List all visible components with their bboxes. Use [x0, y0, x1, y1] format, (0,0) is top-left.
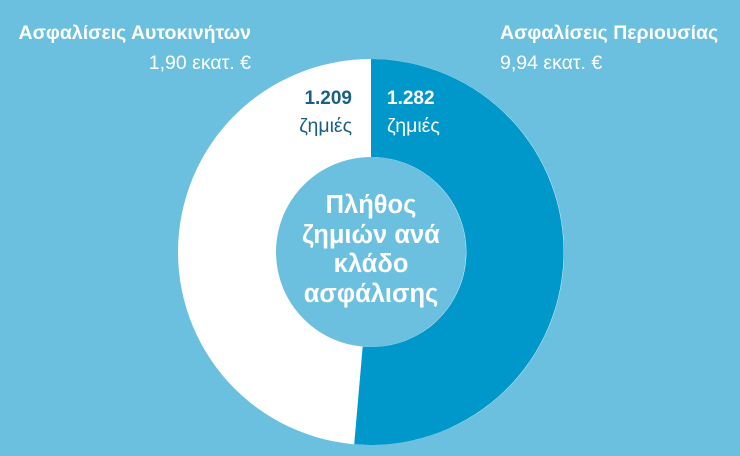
label: property insurance: 9,94 εκατ. €: [500, 52, 602, 74]
value: 1.282 claims: ζημιές: [387, 115, 440, 137]
center title: Πλήθος: [326, 191, 416, 219]
segment: property claims (dark blue): [354, 59, 564, 445]
value: 1.282 claims: 1.282: [387, 88, 435, 109]
center title: ασφάλισης: [304, 280, 438, 308]
label: motor insurance: Ασφαλίσεις Αυτοκινήτων: [18, 22, 251, 44]
value: 1.282 claims: [387, 88, 440, 137]
center title: [302, 191, 440, 308]
value: 1.209 claims: ζημιές: [299, 115, 352, 137]
label: motor insurance: 1,90 εκατ. €: [149, 52, 251, 74]
value: 1.209 claims: [299, 88, 352, 137]
center hole: [276, 157, 466, 347]
label: motor insurance: [18, 22, 251, 74]
value: 1.209 claims: 1.209: [304, 88, 352, 109]
segment: motor claims (white): [178, 59, 564, 445]
center title: κλάδο: [334, 250, 408, 278]
center title: ζημιών ανά: [302, 220, 440, 248]
label: property insurance: [500, 22, 718, 74]
label: property insurance: Ασφαλίσεις Περιουσίας: [500, 22, 718, 44]
